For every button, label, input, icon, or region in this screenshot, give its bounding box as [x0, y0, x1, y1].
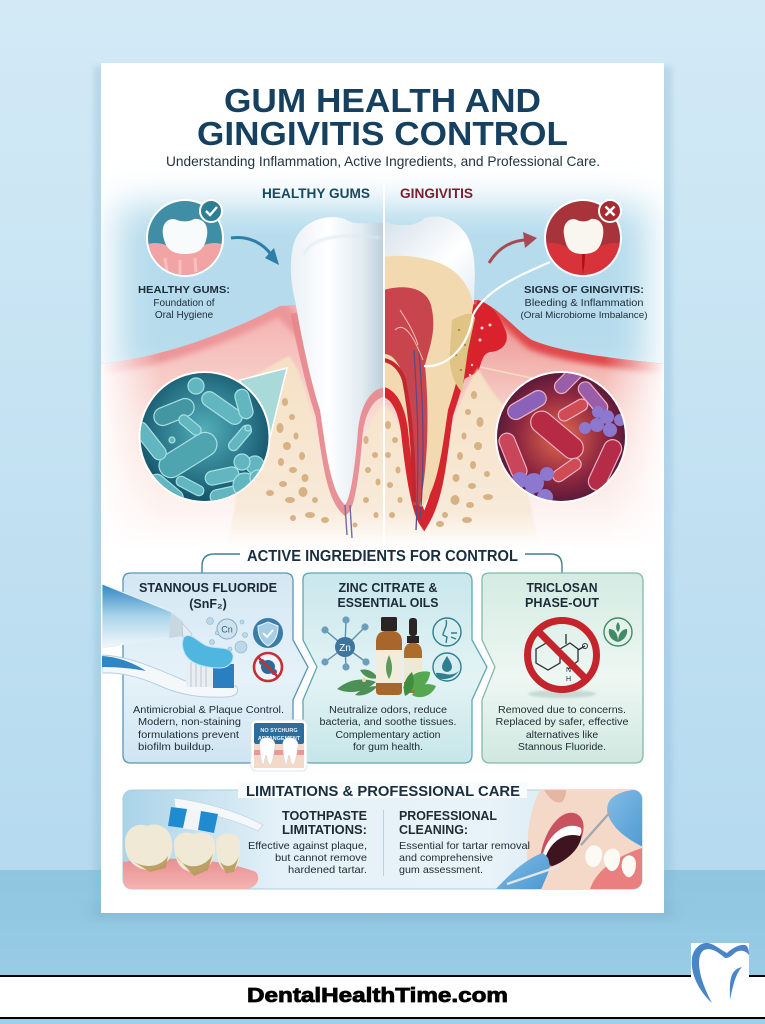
toothpaste limitations text: but cannot remove [275, 852, 367, 864]
card: zinc citrate and essential oils: ESSENTIAL OILS [338, 596, 438, 610]
website text: DentalHealthTime.com [247, 985, 508, 1007]
healthy gums caption [138, 284, 230, 321]
logo: blue tooth mark [691, 943, 749, 1003]
card body text: alternatives like [526, 729, 598, 741]
badge: no staining teeth: NO SYCHURG [260, 728, 298, 734]
icon: prohibited molecule: H [566, 676, 571, 683]
centre divider line [383, 183, 385, 553]
gloves [607, 790, 642, 846]
bone [230, 356, 383, 536]
lips and mouth [540, 813, 584, 867]
card heading: ZINC CITRATE & [338, 581, 438, 595]
badge: no staining teeth: ADTANGEMENT [258, 736, 301, 742]
toothpaste limitations text [248, 808, 367, 876]
toothpaste limitations text: LIMITATIONS: [282, 822, 367, 837]
gum ridge [101, 306, 296, 523]
card body text [320, 704, 456, 753]
card: triclosan phase-out [482, 573, 643, 763]
professional cleaning text [399, 808, 530, 876]
healthy gums caption: HEALTHY GUMS: [138, 284, 230, 296]
card body text [496, 704, 629, 753]
illustration: toothbrush [102, 635, 238, 697]
icon: prohibited molecule: N [566, 667, 571, 674]
inflamed gum ridge [474, 300, 664, 526]
arrow: tooth to gingivitis inset [489, 232, 537, 263]
subtitle: Understanding Inflammation, Active Ingredients, and Professional Care. [166, 153, 600, 169]
badge: no staining teeth [251, 720, 307, 771]
bristles [186, 680, 213, 687]
card body text: Stannous Fluoride. [518, 741, 606, 753]
title: GUM HEALTH AND [224, 82, 541, 119]
icon: dropper bottle [404, 618, 422, 693]
inset: healthy gums circle [145, 199, 225, 280]
card body text: formulations prevent [138, 729, 239, 741]
micro view: healthy bacteria [131, 371, 270, 509]
healthy gums caption: Oral Hygiene [155, 310, 214, 321]
cross badge [599, 200, 621, 222]
gingivitis caption: Bleeding & Inflammation [524, 298, 644, 309]
card: zinc citrate and essential oils [303, 573, 487, 763]
soft gum tissue [102, 305, 383, 526]
blue glow background behind the tooth [118, 205, 647, 380]
icon: eucalyptus leaves [337, 669, 378, 695]
footer band [0, 975, 765, 1019]
dental floss curve [424, 262, 550, 366]
icon: prohibited molecule [528, 620, 596, 698]
card body text: Modern, non-staining [138, 716, 241, 728]
illustration: toothpaste tube [102, 584, 192, 648]
gingivitis caption [520, 284, 648, 321]
icon: ion bubbles [206, 618, 248, 653]
title: GINGIVITIS CONTROL [197, 115, 568, 152]
icon: ion bubbles: Cn [221, 624, 233, 634]
toothbrush head [174, 798, 263, 831]
callout wedge toward healthy microbe view [240, 368, 287, 470]
illustration: dentist treating patient [496, 789, 650, 892]
arrow: healthy inset to tooth [231, 237, 279, 265]
gingivitis side: inflamed gum, bone and tooth cross-section [384, 217, 664, 560]
card body text: bacteria, and soothe tissues. [320, 716, 456, 728]
professional cleaning text: and comprehensive [399, 852, 493, 864]
icon: breath circle [433, 618, 461, 646]
inflamed lower gum [590, 848, 642, 889]
red gum lining around root [384, 305, 478, 522]
side fade [101, 354, 156, 523]
side fade [607, 358, 664, 526]
poster panel [101, 63, 664, 913]
toothpaste limitations text: Effective against plaque, [248, 840, 367, 852]
inflamed soft tissue [384, 300, 664, 550]
active ingredients heading: ACTIVE INGREDIENTS FOR CONTROL [247, 548, 518, 565]
bone [384, 368, 540, 548]
title [197, 82, 568, 152]
professional cleaning text: CLEANING: [399, 822, 468, 837]
icon: large essential oil bottle [376, 617, 402, 695]
icon: green leaf [604, 618, 632, 646]
icon: zinc molecule [321, 616, 370, 671]
inset: gingivitis circle [543, 199, 623, 280]
card body text: Neutralize odors, reduce [329, 704, 447, 716]
card: stannous fluoride [102, 573, 308, 771]
tooth enamel [384, 217, 475, 305]
gum lining around root [295, 313, 384, 510]
section heading with white backing: LIMITATIONS & PROFESSIONAL CARE [246, 784, 520, 800]
card body text: Antimicrobial & Plaque Control. [133, 704, 284, 716]
toothpaste stripe [182, 635, 233, 668]
card: stannous fluoride: (SnF₂) [189, 597, 227, 611]
professional cleaning text: PROFESSIONAL [399, 808, 497, 823]
illustration: teeth with plaque and brush [123, 798, 263, 889]
micro view: gingivitis bacteria [495, 371, 627, 503]
pulp chamber and root canal [384, 287, 433, 505]
healthy tooth [291, 217, 384, 505]
gingivitis caption: SIGNS OF GINGIVITIS: [524, 284, 644, 296]
toothpaste limitations text: TOOTHPASTE [282, 808, 367, 823]
card body text: Complementary action [335, 729, 441, 741]
active ingredients heading [202, 548, 562, 573]
card: triclosan phase-out: PHASE-OUT [525, 596, 599, 610]
icon: zinc molecule: Zn [339, 643, 351, 654]
instruments [581, 810, 612, 845]
icon: mint leaves [403, 671, 436, 697]
tooth dentin [384, 217, 475, 508]
healthy side: gum, bone and tooth [101, 217, 384, 560]
icon: no germs [254, 653, 282, 681]
check badge [200, 200, 222, 222]
tartar deposit [450, 314, 475, 392]
healthy gums label: HEALTHY GUMS [262, 186, 370, 201]
gingivitis caption: (Oral Microbiome Imbalance) [520, 310, 648, 321]
card body text: for gum health. [353, 741, 423, 753]
gingivitis label: GINGIVITIS [400, 186, 473, 201]
card body text: Replaced by safer, effective [496, 716, 629, 728]
toothpaste limitations text: hardened tartar. [288, 864, 367, 876]
icon: shield [253, 618, 283, 648]
card body text: biofilm buildup. [138, 741, 214, 753]
bone pores [266, 398, 380, 528]
card heading: TRICLOSAN [526, 581, 598, 595]
card body text [133, 704, 284, 753]
professional cleaning text: Essential for tartar removal [399, 840, 530, 852]
inflamed gum dots [469, 324, 492, 376]
card heading: STANNOUS FLUORIDE [139, 581, 277, 595]
healthy gums caption: Foundation of [153, 298, 215, 309]
card body text: Removed due to concerns. [498, 704, 626, 716]
panel: limitations and professional care [123, 782, 650, 892]
professional cleaning text: gum assessment. [399, 864, 483, 876]
icon: hand and drop circle [433, 653, 461, 681]
bone pores [385, 391, 493, 527]
